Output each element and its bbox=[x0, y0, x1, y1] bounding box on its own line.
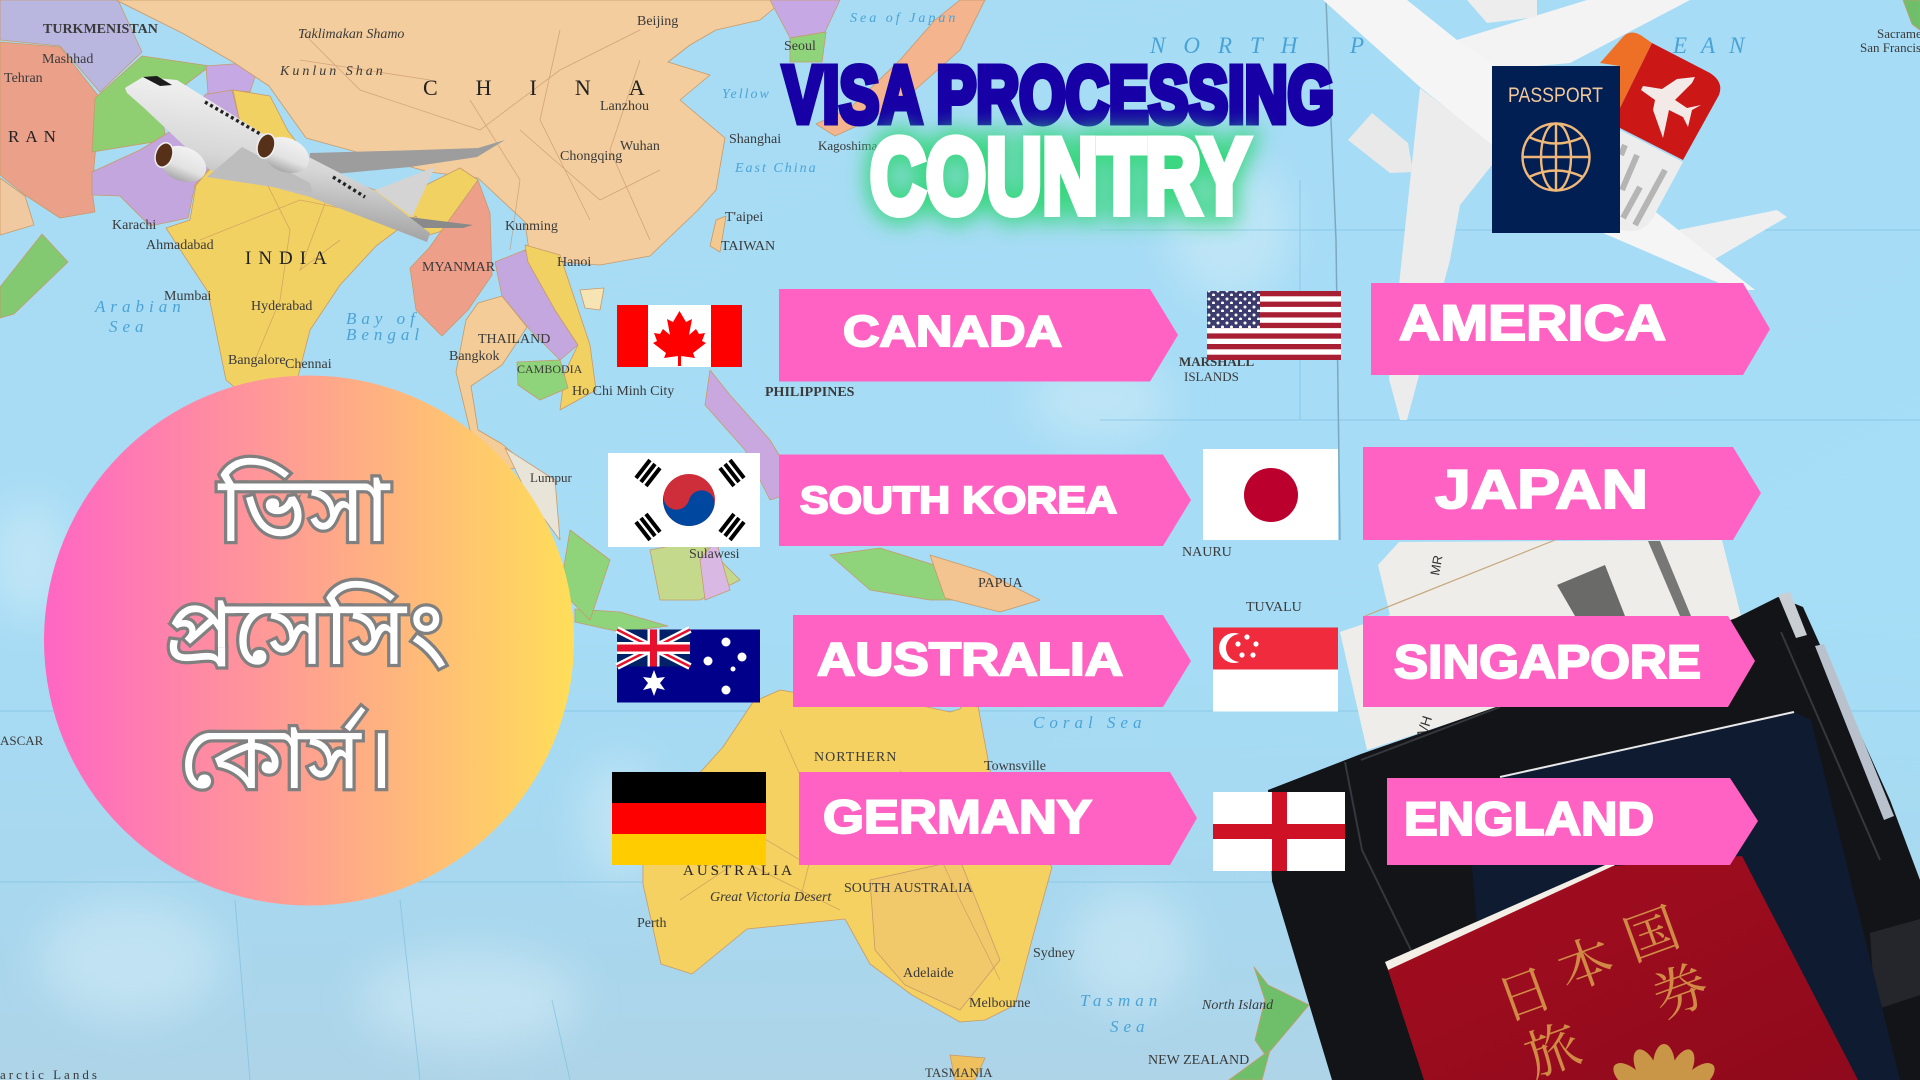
photo: red japanese passport: 日 bbox=[1485, 945, 1562, 1036]
map: place labels: Sea bbox=[1110, 1017, 1150, 1036]
photo: black leather wallet bbox=[1268, 592, 1920, 1080]
map: place labels: Mashhad bbox=[42, 52, 93, 67]
map: place labels: Kunming bbox=[505, 219, 558, 234]
label: america: AMERICA bbox=[1399, 295, 1666, 351]
map: place labels: ASCAR bbox=[0, 733, 44, 748]
map: place labels: PAPUA bbox=[978, 576, 1024, 591]
flag: south korea bbox=[608, 453, 760, 547]
map: place labels: Sea of Japan bbox=[850, 11, 958, 26]
icon: blue passport bbox=[1492, 66, 1620, 233]
bengali text: ভিসা bbox=[218, 459, 391, 561]
flag: japan bbox=[1203, 449, 1338, 540]
map: place labels: EAN bbox=[1672, 33, 1758, 58]
globe emblem bbox=[1522, 124, 1590, 190]
bengali text: প্রসেসিং bbox=[164, 582, 446, 684]
map: place labels: Hanoi bbox=[557, 255, 591, 270]
label: singapore bbox=[1363, 616, 1755, 707]
label: australia bbox=[793, 615, 1191, 707]
row: america bbox=[1207, 283, 1770, 375]
map: place labels: PHILIPPINES bbox=[765, 385, 855, 400]
title bbox=[783, 50, 1334, 236]
row: canada bbox=[617, 289, 1178, 382]
map: place labels: Tehran bbox=[4, 71, 43, 86]
flag: singapore bbox=[1213, 628, 1338, 712]
row: singapore bbox=[1213, 616, 1755, 712]
map: place labels: Kunlun Shan bbox=[279, 64, 386, 79]
glow: country: COUNTRY bbox=[870, 116, 1250, 236]
map: place labels: NEW ZEALAND bbox=[1148, 1053, 1249, 1068]
photo: boarding pass bottom right: A/H bbox=[1413, 714, 1435, 741]
map: place labels: Great Victoria Desert bbox=[710, 890, 832, 905]
map: place labels: Sulawesi bbox=[689, 547, 740, 562]
photo: red japanese passport: 券 bbox=[1641, 942, 1718, 1033]
map: place labels: T'aipei bbox=[725, 210, 763, 225]
map: place labels: East China bbox=[734, 161, 818, 176]
map: place labels: Yellow bbox=[722, 87, 771, 102]
map: place labels: Townsville bbox=[984, 759, 1046, 774]
flag: australia bbox=[617, 630, 760, 702]
map: place labels: AUSTRALIA bbox=[683, 863, 795, 879]
map: place labels: Sea bbox=[109, 317, 149, 336]
circle: course title bbox=[44, 376, 574, 906]
map: place labels: NAURU bbox=[1182, 545, 1232, 560]
map: place labels: Bay of bbox=[346, 309, 420, 328]
label: germany: GERMANY bbox=[823, 790, 1092, 843]
map: place labels: Wuhan bbox=[620, 139, 660, 154]
map: place labels: NORTHERN bbox=[814, 750, 897, 765]
map: place labels: Coral Sea bbox=[1033, 713, 1146, 732]
map: place labels: Mumbai bbox=[164, 289, 212, 304]
bengali text: কোর্স। bbox=[180, 706, 394, 807]
icon: plane boarding ticket bbox=[1600, 32, 1720, 231]
map: place labels: ISLANDS bbox=[1184, 369, 1239, 384]
map: place labels: MYANMAR bbox=[422, 260, 496, 275]
passport label: PASSPORT bbox=[1508, 84, 1603, 107]
map: place labels: Kagoshima bbox=[818, 138, 877, 153]
title line: visa processing: VISA PROCESSING bbox=[783, 50, 1334, 139]
map: place labels: SOUTH AUSTRALIA bbox=[844, 881, 974, 896]
label: america bbox=[1371, 283, 1770, 375]
label: canada bbox=[779, 289, 1178, 382]
photo: white model airplane top right bbox=[1323, 0, 1787, 420]
label: japan: JAPAN bbox=[1435, 458, 1648, 520]
map: place labels: Ho Chi Minh City bbox=[572, 384, 674, 399]
map: place labels: Seoul bbox=[784, 39, 816, 54]
label: south korea: SOUTH KOREA bbox=[800, 480, 1117, 522]
map: place labels: TAIWAN bbox=[721, 239, 775, 254]
map: place labels: MARSHALL bbox=[1179, 354, 1254, 369]
label: japan bbox=[1363, 447, 1761, 540]
label: canada: CANADA bbox=[843, 307, 1062, 356]
flag: england bbox=[1213, 792, 1345, 871]
airplane left bbox=[125, 76, 505, 242]
map: place labels: Shanghai bbox=[729, 132, 781, 147]
map: place labels: TUVALU bbox=[1246, 600, 1302, 615]
map: place labels: Bangalore bbox=[228, 353, 286, 368]
row: germany bbox=[612, 772, 1197, 865]
row: australia bbox=[617, 615, 1191, 707]
flag: canada bbox=[617, 305, 742, 367]
map: place labels: Adelaide bbox=[903, 966, 954, 981]
title line: country: COUNTRY bbox=[870, 116, 1250, 236]
map: place labels: Lumpur bbox=[530, 470, 573, 485]
label: south korea bbox=[779, 454, 1191, 546]
map: roads and rivers bbox=[200, 30, 1000, 980]
map: place labels: Sydney bbox=[1033, 946, 1075, 961]
photo: red japanese passport: 本 bbox=[1546, 915, 1623, 1006]
map: place labels: P bbox=[1349, 33, 1382, 58]
label: germany bbox=[799, 772, 1197, 865]
label: england bbox=[1387, 778, 1758, 865]
bengali text bbox=[164, 459, 446, 807]
map: place labels: CAMBODIA bbox=[517, 362, 583, 376]
row: england bbox=[1213, 778, 1758, 871]
map: place labels: Chennai bbox=[285, 357, 332, 372]
map: place labels: Perth bbox=[637, 916, 667, 931]
flag: usa bbox=[1207, 291, 1341, 360]
map: place labels: Taklimakan Shamo bbox=[298, 27, 404, 42]
flag: germany bbox=[612, 772, 766, 865]
map: place labels: INDIA bbox=[245, 248, 334, 269]
map: place labels: Lanzhou bbox=[600, 99, 649, 114]
map: place labels: TURKMENISTAN bbox=[43, 22, 158, 37]
photo: navy passport bbox=[1472, 712, 1900, 1080]
map: place labels: Tasman bbox=[1080, 991, 1162, 1010]
map: place labels: Karachi bbox=[112, 218, 156, 233]
row: japan bbox=[1203, 447, 1761, 540]
map: place labels: THAILAND bbox=[478, 332, 550, 347]
map: place labels: Arabian bbox=[94, 297, 186, 316]
label: singapore: SINGAPORE bbox=[1394, 635, 1701, 688]
map: place labels: Chongqing bbox=[560, 149, 622, 164]
map: place labels: Hyderabad bbox=[251, 299, 312, 314]
photo: boarding pass bottom right: MR bbox=[1427, 554, 1445, 577]
map: place labels: Bengal bbox=[346, 325, 424, 344]
map: place labels: Ahmadabad bbox=[146, 238, 214, 253]
map: place labels: North Island bbox=[1201, 998, 1274, 1013]
map: place labels: CHINA bbox=[423, 75, 683, 100]
map: place labels: Melbourne bbox=[969, 996, 1030, 1011]
map: place labels: Beijing bbox=[637, 14, 678, 29]
map: place labels: RAN bbox=[8, 127, 62, 146]
photo: red japanese passport bbox=[1385, 856, 1858, 1080]
map: place labels: Bangkok bbox=[449, 349, 500, 364]
label: england: ENGLAND bbox=[1404, 792, 1654, 845]
photo: red japanese passport: 国 bbox=[1612, 885, 1689, 976]
row: south korea bbox=[608, 453, 1191, 547]
map: place labels: TASMANIA bbox=[925, 1065, 993, 1080]
map: place labels: NORTH bbox=[1149, 33, 1315, 58]
photo: boarding pass bottom right bbox=[1340, 540, 1742, 750]
label: australia: AUSTRALIA bbox=[817, 633, 1123, 685]
